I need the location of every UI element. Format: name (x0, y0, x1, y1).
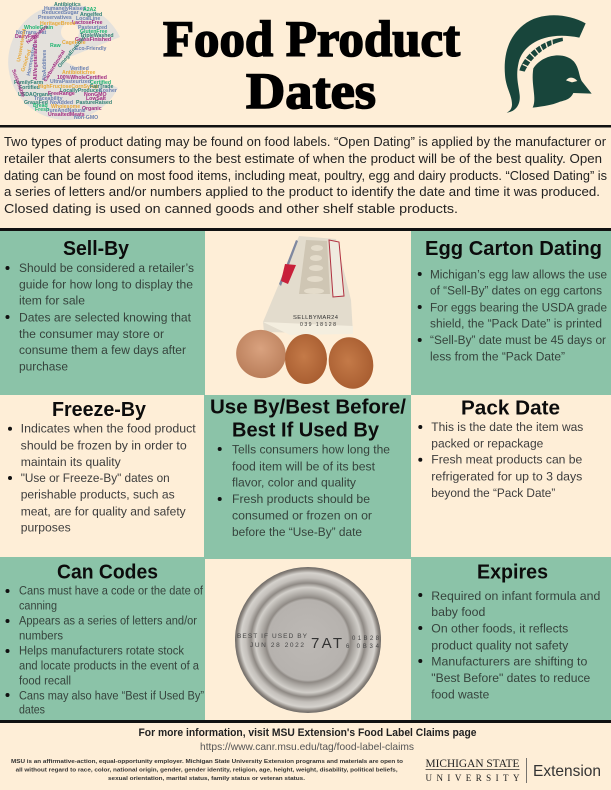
word cloud: NoNitrates (25, 24, 49, 46)
word cloud: LocalLine (76, 16, 100, 22)
word cloud: Organic (82, 106, 102, 112)
panel: Freeze-By: Freeze-By (52, 399, 147, 421)
word cloud: A2A2 (83, 7, 96, 13)
panel: Expires: "Best Before" dates to reduce (431, 671, 591, 685)
word cloud: LowSalt (86, 96, 106, 102)
word cloud: Preservatives (38, 15, 72, 21)
word cloud: CageFree (62, 40, 86, 46)
word cloud: Pasteurized (78, 25, 107, 31)
icon: Spartan helmet logo (505, 15, 592, 113)
word cloud: USDAOrganic (18, 92, 52, 98)
black divider lines (0, 125, 611, 128)
panel: Can Codes: and locate products in the event of a (19, 658, 199, 672)
panel: Sell-By: the consumer may store or (19, 327, 164, 341)
word cloud: TripleWashed (80, 33, 114, 39)
panel: Sell-By: item for sale (19, 294, 85, 308)
photo: can lid with date code: JUN 28 2022 (250, 642, 304, 649)
panel: Use By/Best Before/Best If Used By: Use By/Best Before/ (210, 397, 406, 419)
word cloud: WholeGrain (24, 25, 53, 31)
panel: Sell-By: guide for how long to display the (19, 278, 193, 292)
word cloud: Bread (33, 103, 48, 109)
word cloud: Antibioticfree (62, 70, 96, 76)
photo: egg carton and eggs: 039 18128 (300, 322, 336, 328)
black divider line (0, 720, 611, 723)
panel: Sell-By: consume them a few days after (19, 343, 186, 357)
panel: Freeze-By: meat, are for quality and safety (21, 504, 187, 518)
word cloud: GrassFed (24, 100, 48, 106)
word cloud: Antibiotics (54, 2, 81, 8)
panel: Expires: Required on infant formula and (431, 589, 600, 603)
title: Dates (246, 64, 376, 120)
panel: Use By/Best Before/Best If Used By: flavor, color and quality (232, 476, 357, 490)
word cloud: LactoseFree (72, 20, 103, 26)
panel: Sell-By: Dates are selected knowing that (19, 310, 192, 324)
panel: Can Codes: dates (19, 703, 45, 717)
panel: Expires: product quality not safety (431, 638, 569, 652)
intro paragraph (4, 135, 607, 216)
Michigan State University Extension logo (426, 758, 601, 783)
panel: Use By/Best Before/Best If Used By: consumed or frozen on or (232, 509, 372, 523)
word cloud: NonGMO (84, 92, 106, 98)
word cloud: ReducedSugar (42, 10, 79, 16)
panel: Use By/Best Before/Best If Used By: before the “Use-By” date (232, 525, 362, 539)
word cloud: PureAndNatural (46, 108, 86, 114)
panel backgrounds (0, 231, 611, 720)
panel: Use By/Best Before/Best If Used By: Best If Used By (232, 419, 380, 441)
panel: Pack Date: This is the date the item was (431, 420, 583, 434)
panel: Can Codes: food recall (19, 673, 71, 687)
panel: Can Codes: Can Codes (57, 562, 158, 584)
intro paragraph: dating can be found on most food items, including meat, poultry, egg and dairy products. “Closed Dating” is (4, 169, 607, 183)
word cloud: Fresh (35, 107, 49, 113)
word cloud: PastureRaised (76, 100, 112, 106)
panel: Can Codes: Appears as a series of letters and/or (19, 613, 197, 627)
word cloud: FairTrade (90, 84, 113, 90)
Michigan State University Extension logo: MICHIGAN STATE (426, 758, 520, 770)
word cloud: GrainFed (20, 49, 33, 73)
word cloud: Wholesome (51, 104, 80, 110)
panel: Freeze-By: should be frozen by in order to (21, 438, 187, 452)
word cloud: CarbonNeutral (43, 49, 67, 83)
title: Food Product (163, 12, 460, 68)
panel: Expires: food waste (431, 687, 490, 701)
word cloud: OmegaEnriched (57, 35, 87, 69)
panel: Egg Carton Dating: shield, the “Pack Date” is printed (430, 316, 602, 330)
panel: Use By/Best Before/Best If Used By: food item will be of its best (232, 459, 376, 473)
word cloud: Sustainable (10, 69, 26, 98)
word cloud: Non-GMO (74, 115, 98, 121)
Michigan State University Extension logo: Extension (533, 763, 601, 780)
panel: Use By/Best Before/Best If Used By (210, 397, 406, 539)
panel: Can Codes: Helps manufacturers rotate stock (19, 643, 185, 657)
panel: Freeze-By: "Use or Freeze-By" dates on (21, 471, 170, 485)
panel: Can Codes: numbers (19, 628, 63, 642)
panel: Egg Carton Dating: Michigan’s egg law allows the use (430, 268, 607, 282)
panel: Expires: Expires (477, 562, 548, 584)
panel: Freeze-By: perishable products, such as (21, 488, 175, 502)
panel: Can Codes: Cans may also have “Best if Used By” (19, 688, 204, 702)
title (163, 12, 460, 120)
photo: can lid with date code: BEST IF USED BY (237, 633, 308, 640)
legal disclaimer: all without regard to race, color, national origin, gender, gender identity, religion, age, height, weight, disability, political beliefs, (16, 768, 398, 774)
footer call to action: For more information, visit MSU Extension's Food Label Claims page (138, 727, 476, 739)
panel: Egg Carton Dating (418, 238, 607, 363)
panel: Can Codes: canning (19, 598, 57, 612)
word cloud: Angelfed (80, 12, 102, 18)
word cloud: 100%WholeCertified (57, 75, 107, 81)
intro paragraph: Two types of product dating may be found on food labels. “Open Dating” is applied by the manufacturer or (4, 135, 606, 149)
intro paragraph: Closed dating is used on canned goods and other shelf stable products. (4, 202, 458, 216)
word cloud: AllVegetarianDiet (33, 37, 39, 80)
panel: Expires (418, 562, 600, 701)
panel: Pack Date (418, 398, 583, 500)
word cloud: HumanelyRaised (44, 6, 86, 12)
legal disclaimer (11, 759, 404, 782)
word cloud: GrassFinished (75, 37, 111, 43)
panel: Expires: On other foods, it reflects (431, 622, 568, 636)
word cloud: NoTrans-Fat (16, 30, 47, 36)
panel: Pack Date: packed or repackage (431, 437, 544, 451)
word cloud: HeritageBreed (40, 21, 75, 27)
word cloud: Certified (90, 80, 111, 86)
word cloud: DairyFree (15, 34, 39, 40)
word cloud: LocallyProduced (60, 88, 102, 94)
panel: Pack Date: Pack Date (461, 398, 560, 420)
word cloud: Raw (50, 43, 62, 49)
panel: Egg Carton Dating: For eggs bearing the USDA grade (430, 300, 607, 314)
panel: Freeze-By (8, 399, 196, 534)
panel: Sell-By (6, 238, 194, 374)
word cloud: GlutenFree (80, 29, 107, 35)
panel: Use By/Best Before/Best If Used By: Fresh products should be (232, 492, 370, 506)
panel: Egg Carton Dating: Egg Carton Dating (425, 238, 602, 260)
panel: Pack Date: beyond the “Pack Date” (431, 486, 555, 500)
panel: Can Codes: Cans must have a code or the date of (19, 583, 204, 597)
panel: Sell-By: purchase (19, 360, 68, 374)
word cloud: Hormonefree (26, 43, 38, 76)
panel: Use By/Best Before/Best If Used By: Tells consumers how long the (232, 443, 390, 457)
panel: Egg Carton Dating: of “Sell-By” dates on egg cartons (430, 284, 602, 298)
word cloud: FreeRange (48, 91, 75, 97)
panel: Freeze-By: purposes (21, 520, 71, 534)
word cloud: HighFructoseCornSyrup (38, 84, 98, 90)
footer call to action (138, 727, 476, 753)
word cloud: Kosher (99, 88, 117, 94)
word cloud: Eco-Friendly (75, 46, 107, 52)
photo: can lid with date code (235, 567, 381, 713)
panel: Expires: baby food (431, 605, 485, 619)
word cloud: UltraPasteurized (50, 79, 91, 85)
panel: Sell-By: Should be considered a retailer’s (19, 261, 194, 275)
legal disclaimer: MSU is an affirmative-action, equal-opportunity employer. Michigan State University Extension programs and materials are open to (11, 759, 404, 765)
photo: can lid with date code: 6 0B34 (346, 644, 380, 650)
photo: can lid with date code: 7AT (311, 635, 342, 652)
panel: Expires: Manufacturers are shifting to (431, 654, 588, 668)
photo: can lid with date code: 01B28 (352, 636, 380, 642)
panel: Freeze-By: Indicates when the food product (21, 422, 196, 436)
panel: Egg Carton Dating: less from the “Pack Date” (430, 349, 565, 363)
word cloud: Verified (70, 66, 89, 72)
word cloud: NoAdded (50, 100, 73, 106)
word cloud: NoAdditives (42, 50, 48, 80)
panel: Pack Date: Fresh meat products can be (431, 453, 583, 467)
photo: egg carton and eggs (228, 236, 379, 394)
intro paragraph: a series of letters and/or numbers applied to the product to identify the date and time it was produced. (4, 185, 600, 199)
panel: Freeze-By: maintain its quality (21, 455, 122, 469)
intro paragraph: retailer that alerts consumers to the best estimate of when the product will be of the best quality. Open (4, 152, 602, 166)
footer call to action: https://www.canr.msu.edu/tag/food-label-claims (200, 742, 414, 753)
word cloud: Traceability (34, 96, 63, 102)
word cloud (8, 2, 120, 121)
panel: Can Codes (6, 562, 204, 717)
word cloud: FamilyFarm (14, 80, 44, 86)
Michigan State University Extension logo: UNIVERSITY (426, 773, 520, 783)
panel: Sell-By: Sell-By (63, 238, 130, 260)
legal disclaimer: sexual orientation, marital status, family status or veteran status. (108, 776, 306, 782)
word cloud: Fortified (19, 85, 40, 91)
panel: Pack Date: refrigerated for up to 3 days (431, 469, 582, 483)
panel: Egg Carton Dating: “Sell-By” date must be 45 days or (430, 333, 606, 347)
word cloud: Unsweetened (16, 28, 28, 62)
photo: egg carton and eggs: SELLBYMAR24 (293, 315, 339, 321)
word cloud: UnsaltedMeats (48, 112, 85, 118)
